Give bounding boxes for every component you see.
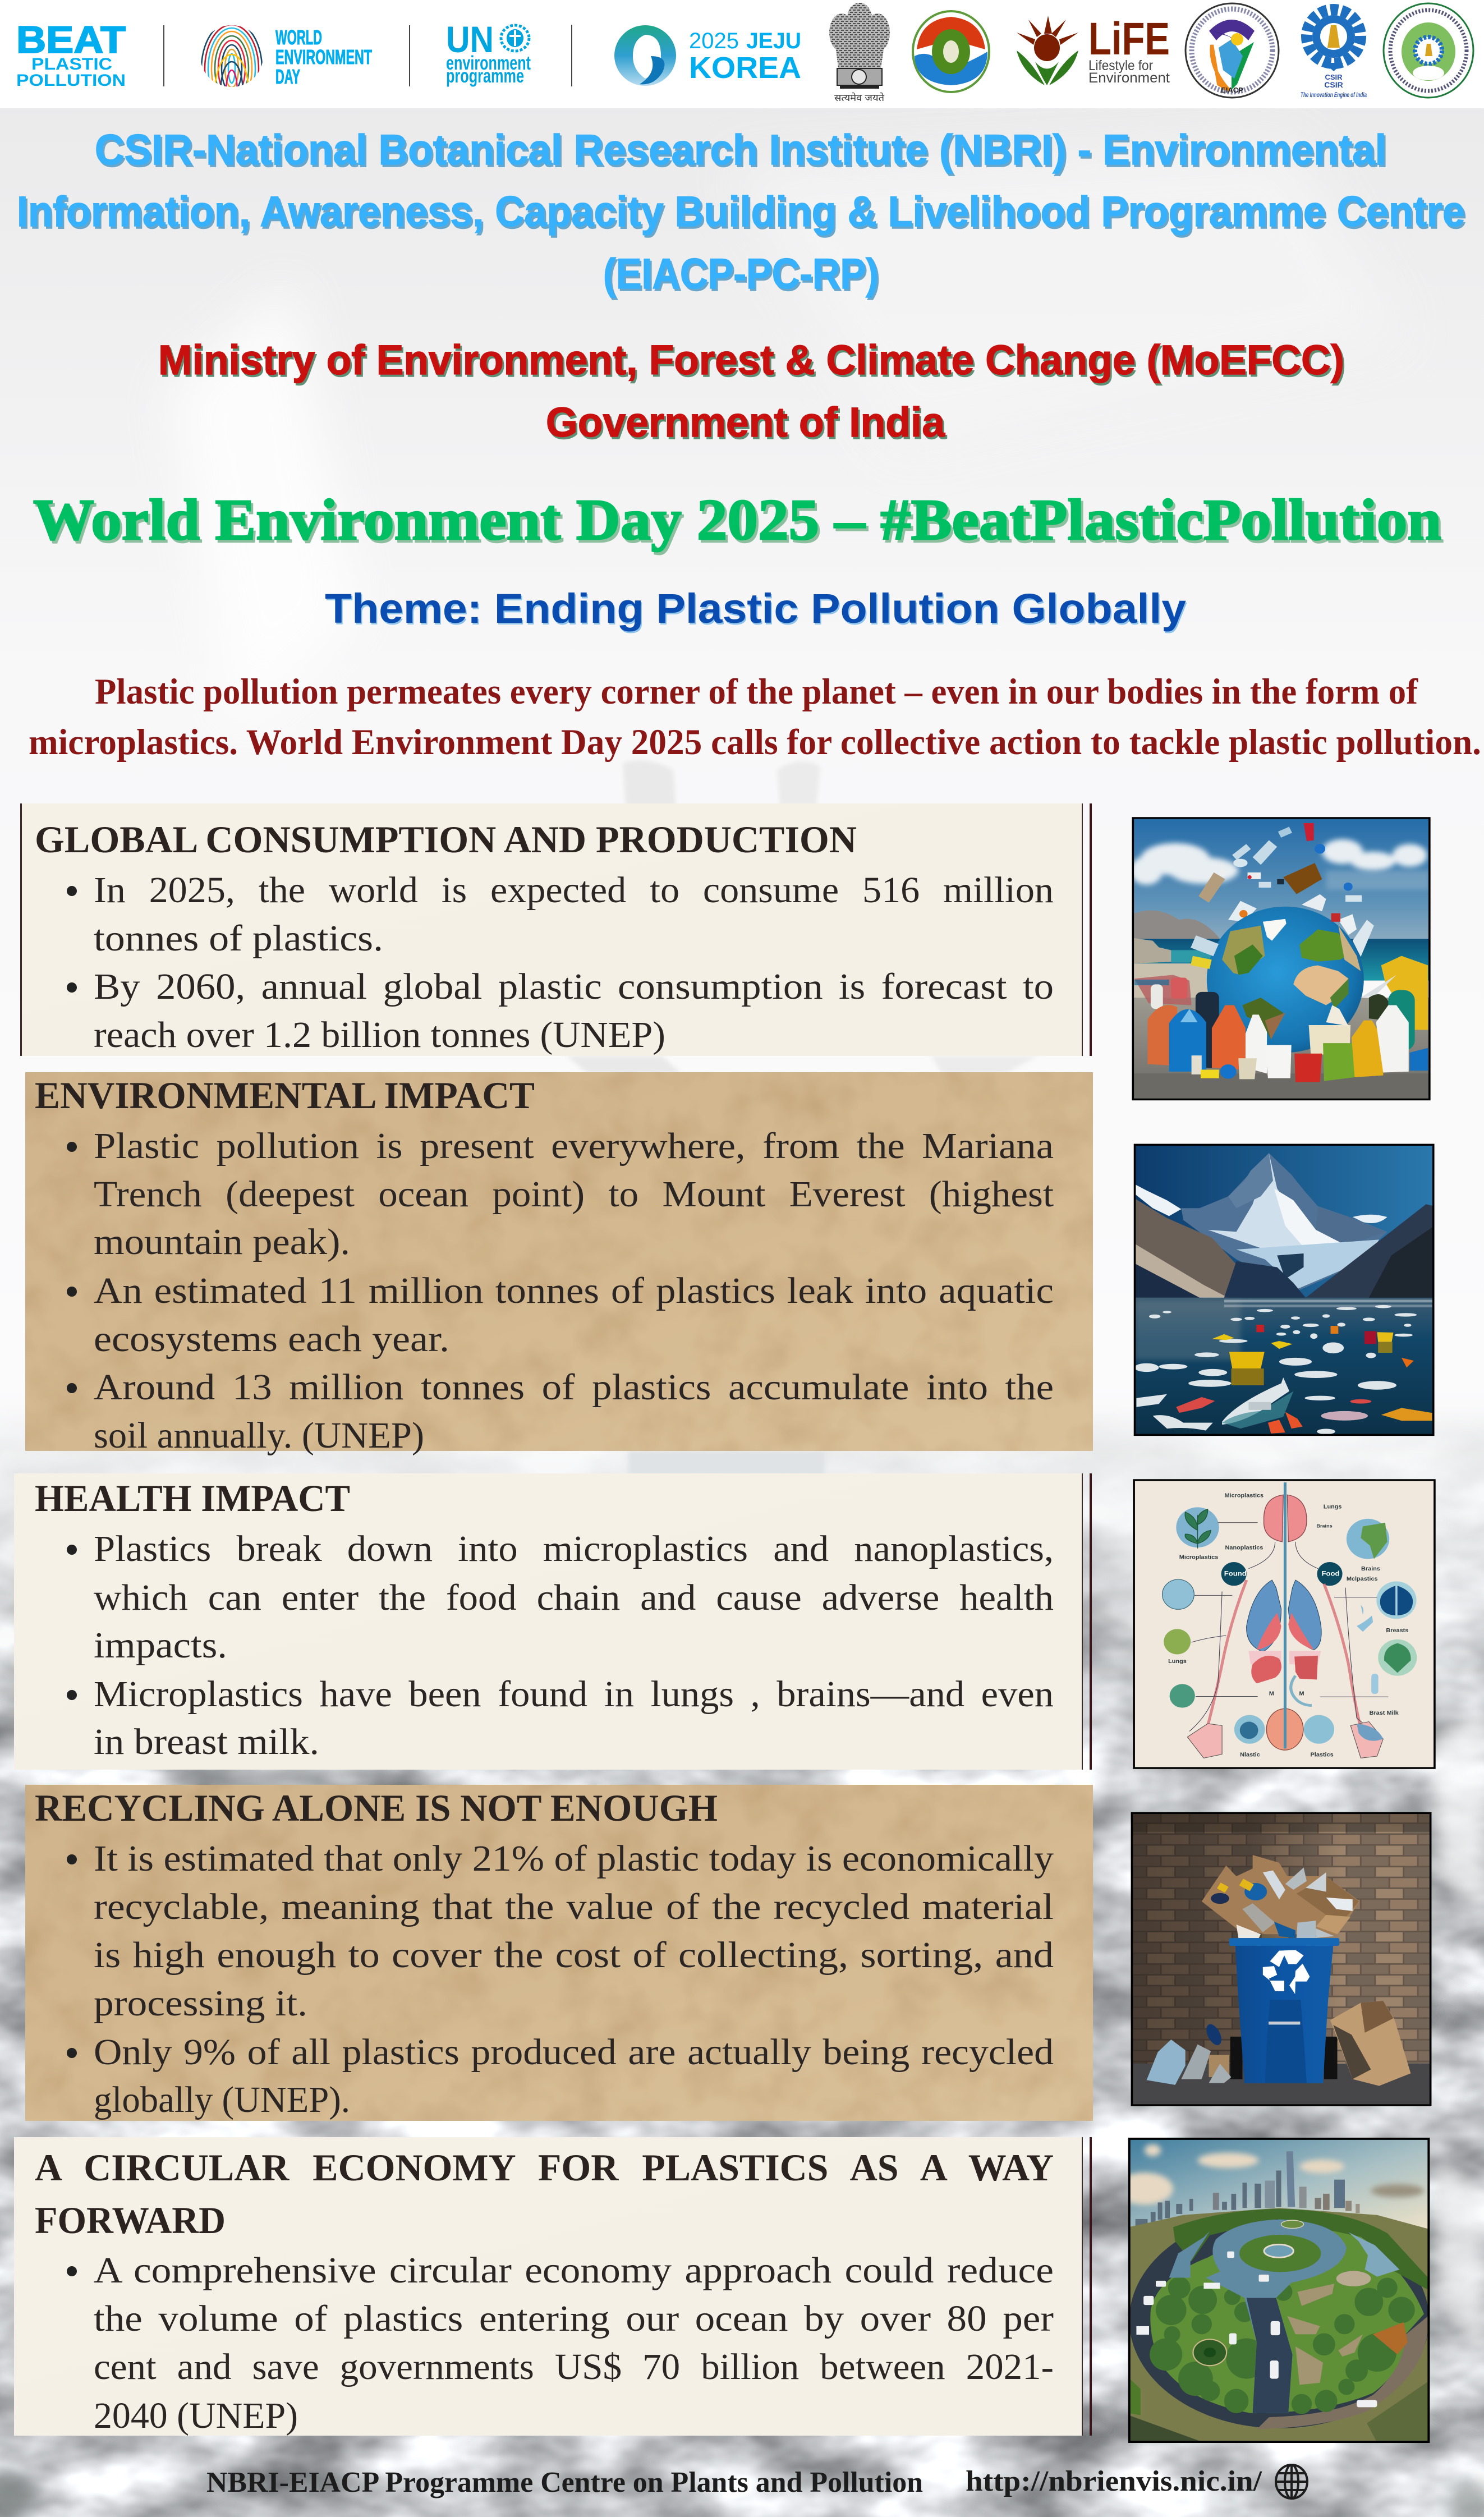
logo: Beat Plastic Pollution: PLASTIC <box>31 55 112 74</box>
logo: World Environment Day fingerprint: DAY <box>275 65 300 88</box>
logo: 2025 Jeju Korea: KOREA <box>689 51 801 85</box>
bullet list <box>67 1126 1054 1456</box>
footer credit: http://nbrienvis.nic.in/ <box>966 2465 1262 2497</box>
logo: Beat Plastic Pollution: BEAT <box>16 19 126 61</box>
organs and circles <box>1163 1482 1417 1758</box>
logo: World Environment Day fingerprint: ENVIRONMENT <box>275 45 372 68</box>
logo: Nature Protects if She is Protected <box>913 11 989 92</box>
panel: health impact <box>14 1473 1092 1770</box>
heading: institute name <box>17 126 1465 298</box>
diagram labels: Brast Milk <box>1370 1710 1399 1716</box>
heading: A CIRCULAR ECONOMY FOR PLASTICS AS A WAY <box>35 2146 1054 2189</box>
bullet list: processing it. <box>94 1983 307 2024</box>
bullet list: globally (UNEP). <box>94 2079 350 2120</box>
heading: ministry <box>158 337 1344 445</box>
heading: RECYCLING ALONE IS NOT ENOUGH <box>35 1786 718 1829</box>
bullet list: A comprehensive circular economy approach could reduce <box>94 2250 1054 2291</box>
bullet list: cent and save governments US$ 70 billion between 2021- <box>94 2346 1054 2387</box>
blue bin <box>1229 1938 1339 2083</box>
footer credit <box>206 2465 1262 2498</box>
intro paragraph: Plastic pollution permeates every corner of the planet – even in our bodies in the form of <box>95 672 1418 712</box>
bullet list: 2040 (UNEP) <box>94 2395 298 2436</box>
cars <box>1136 2252 1377 2407</box>
image: mountain and polluted lake <box>1133 1143 1435 1436</box>
diagram labels: Brains <box>1316 1523 1333 1529</box>
logo: World Environment Day fingerprint: WORLD <box>275 26 322 49</box>
bullet list: Microplastics have been found in lungs , brains—and even <box>94 1674 1054 1715</box>
bullet list: impacts. <box>94 1625 227 1666</box>
heading: ENVIRONMENTAL IMPACT <box>35 1074 535 1117</box>
diagram labels: M <box>1269 1691 1274 1697</box>
diagram labels <box>1168 1492 1408 1758</box>
diagram labels: Breasts <box>1386 1627 1408 1634</box>
bullet list: By 2060, annual global plastic consumption is forecast to <box>94 966 1054 1007</box>
bullet list: In 2025, the world is expected to consume 516 million <box>94 870 1054 911</box>
intro paragraph: microplastics. World Environment Day 2025 calls for collective action to tackle plastic pollution. <box>29 722 1481 763</box>
logo: CSIR <box>1301 10 1367 99</box>
bullet list <box>67 1528 1054 1762</box>
logo: UN environment programme <box>446 19 531 87</box>
image: overflowing recycling bin <box>1131 1812 1432 2106</box>
bullet list: Trench (deepest ocean point) to Mount Everest (highest <box>94 1174 1054 1215</box>
logo strip <box>0 0 1484 108</box>
bullet list: which can enter the food chain and cause adverse health <box>94 1577 1054 1618</box>
bullet list: ecosystems each year. <box>94 1319 449 1359</box>
theme line: Theme: Ending Plastic Pollution Globally <box>325 585 1186 632</box>
bullet list: is high enough to cover the cost of collecting, sorting, and <box>94 1935 1054 1976</box>
bullet list: tonnes of plastics. <box>94 918 383 959</box>
footer credit: NBRI-EIACP Programme Centre on Plants and Pollution <box>206 2467 923 2498</box>
bullet list: Plastics break down into microplastics and nanoplastics, <box>94 1528 1054 1569</box>
panel: global consumption and production <box>20 803 1092 1056</box>
bullet list: reach over 1.2 billion tonnes (UNEP) <box>94 1014 665 1055</box>
heading <box>35 2146 1054 2242</box>
bullet list: Plastic pollution is present everywhere, from the Mariana <box>94 1126 1054 1166</box>
diagram labels: Found <box>1224 1570 1247 1577</box>
logo: LiFE Lifestyle for Environment: Lifestyle for <box>1088 58 1153 74</box>
heading: FORWARD <box>35 2199 226 2242</box>
bullet list: Only 9% of all plastics produced are actually being recycled <box>94 2032 1054 2073</box>
bullet list: the volume of plastics entering our ocean by over 80 per <box>94 2298 1054 2339</box>
lake and channels <box>1169 2231 1210 2277</box>
heading: World Environment Day 2025: World Environment Day 2025 – #BeatPlasticPollution <box>33 488 1441 552</box>
image: plastics in the human body diagram <box>1133 1479 1436 1769</box>
diagram labels: Lungs <box>1168 1658 1187 1665</box>
bullet list: It is estimated that only 21% of plastic today is economically <box>94 1838 1054 1879</box>
bullet list: mountain peak). <box>94 1221 350 1262</box>
heading: institute name: (EIACP-PC-RP) <box>603 250 879 298</box>
logo: CSIR-NBRI Lucknow <box>1384 3 1473 98</box>
diagram labels: Mclpastics <box>1347 1576 1378 1582</box>
intro paragraph <box>29 672 1481 763</box>
diagram labels: Nanoplastics <box>1225 1545 1263 1551</box>
bottles on the floor <box>1147 2022 1231 2085</box>
logo: Beat Plastic Pollution: POLLUTION <box>16 71 126 90</box>
heading: GLOBAL CONSUMPTION AND PRODUCTION <box>35 818 857 861</box>
heading: institute name: CSIR-National Botanical Research Institute (NBRI) - Environmental <box>95 126 1386 174</box>
logo: UN environment programme: programme <box>446 65 524 87</box>
logo: LiFE Lifestyle for Environment: Environment <box>1088 70 1170 86</box>
diagram labels: Microplastics <box>1224 1492 1264 1499</box>
bullet list: in breast milk. <box>94 1721 319 1762</box>
diagram labels: Plastics <box>1311 1752 1334 1758</box>
land and road <box>1129 2208 1429 2442</box>
bullet list: Around 13 million tonnes of plastics accumulate into the <box>94 1367 1054 1408</box>
heading: HEALTH IMPACT <box>35 1477 350 1519</box>
image: globe surrounded by plastic containers <box>1132 817 1431 1101</box>
image: green circular city <box>1128 2138 1430 2443</box>
logo: CSIR: CSIR <box>1324 80 1343 89</box>
logo: LiFE Lifestyle for Environment: LiFE <box>1088 13 1170 65</box>
panel: environmental impact <box>25 1072 1093 1456</box>
icon: globe <box>1276 2465 1307 2498</box>
parkland <box>1150 2219 1424 2413</box>
diagram labels: Food <box>1322 1570 1340 1577</box>
skyline <box>1136 2151 1360 2227</box>
bullet list: recyclable, meaning that the value of the recycled material <box>94 1886 1054 1927</box>
panel: a circular economy for plastics <box>14 2137 1092 2436</box>
diagram labels: Microplastics <box>1179 1554 1219 1560</box>
falling plastic <box>1198 823 1362 922</box>
logo: 2025 Jeju Korea: JEJU <box>746 29 801 53</box>
panel: recycling alone is not enough <box>25 1785 1093 2121</box>
heading: ministry: Government of India <box>546 399 945 445</box>
hand fingers behind first panel <box>567 760 1038 1476</box>
logo: Beat Plastic Pollution <box>16 19 126 90</box>
bullet list <box>67 2250 1054 2436</box>
diagram labels: Lungs <box>1324 1504 1342 1510</box>
diagram labels: M <box>1299 1691 1304 1697</box>
cardboard and bottles <box>1202 1855 1360 1938</box>
bullet list: An estimated 11 million tonnes of plastics leak into aquatic <box>94 1270 1054 1311</box>
logo: national emblem of India <box>829 3 890 103</box>
diagram labels: Nlastic <box>1240 1752 1260 1758</box>
logo: 2025 Jeju Korea: 2025 <box>689 29 739 53</box>
bullet list <box>67 870 1054 1055</box>
logo: World Environment Day fingerprint <box>201 25 373 87</box>
logo: EIACP: EIACP <box>1221 86 1243 94</box>
diagram labels: Brains <box>1361 1565 1380 1572</box>
logo: EIACP <box>1186 3 1279 98</box>
heading: ministry: Ministry of Environment, Forest & Climate Change (MoEFCC) <box>158 337 1344 383</box>
logo: national emblem of India: सत्यमेव जयते <box>834 92 884 103</box>
logo: CSIR: CSIR <box>1325 73 1343 81</box>
bullet list <box>67 1838 1054 2120</box>
bullet list: soil annually. (UNEP) <box>94 1415 424 1456</box>
logo: UN environment programme: environment <box>446 52 531 74</box>
paper bag <box>1330 2001 1411 2086</box>
logo: CSIR: The Innovation Engine of India <box>1301 91 1367 99</box>
logo: 2025 Jeju Korea <box>614 25 801 86</box>
logo: UN environment programme: UN <box>446 19 494 60</box>
logo: LiFE Lifestyle for Environment <box>1017 13 1170 86</box>
